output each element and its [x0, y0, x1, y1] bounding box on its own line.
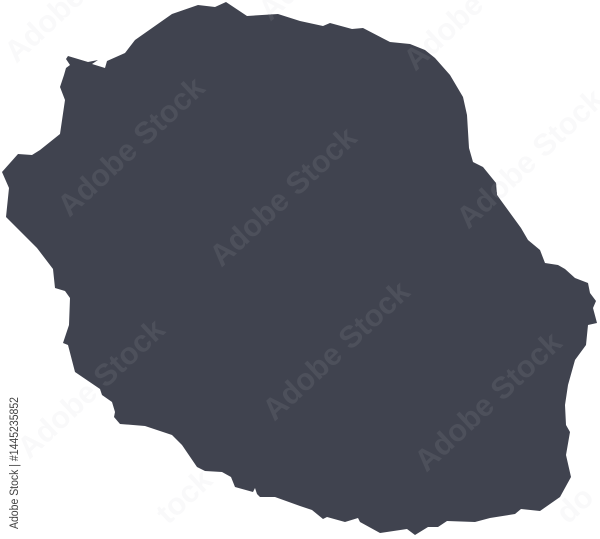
watermarks on white background: Adobe Stock [10, 311, 172, 465]
watermarks over map: Adobe Stock [202, 119, 364, 273]
watermarks on white background: tock [149, 461, 220, 531]
watermarks over map: Adobe Stock [407, 324, 569, 478]
watermarks on white background: do [549, 479, 600, 530]
side credit text: Adobe Stock | #1445235852 [9, 397, 21, 529]
watermarks over map: Adobe Stock [50, 69, 212, 223]
watermarks over map: Adobe Stock [10, 311, 172, 465]
watermarks over map: Adobe Stock [255, 273, 417, 427]
